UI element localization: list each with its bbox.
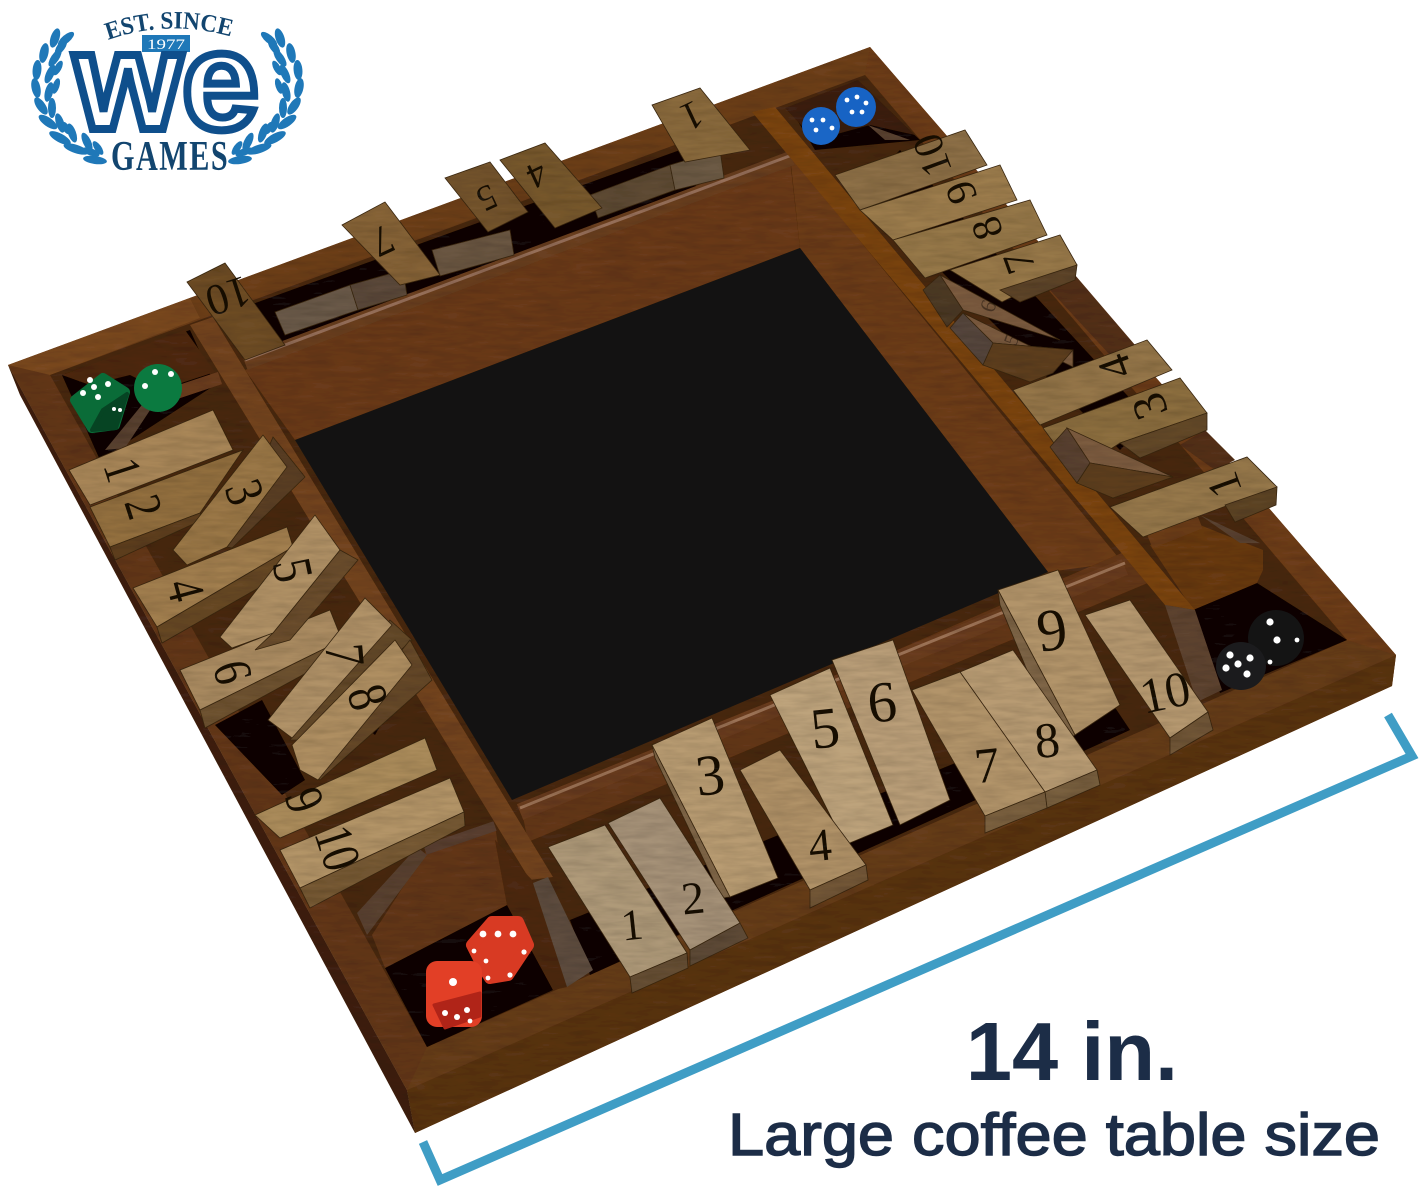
left tile 2 xyxy=(90,450,243,560)
logo laurel left xyxy=(30,27,107,166)
bottom tile 7: 7 xyxy=(972,736,1002,794)
all shut-the-box tiles xyxy=(69,88,1277,993)
flat tile pair A xyxy=(275,270,407,335)
right flipped tile 5 xyxy=(950,313,1073,382)
compartment wall: blue dice xyxy=(785,80,915,140)
dice: blue pair xyxy=(802,87,876,145)
compartment wall: black dice xyxy=(1150,525,1263,610)
dimension heading: 14 in.: 14 in. xyxy=(966,1005,1178,1098)
left tile 3 xyxy=(173,435,305,565)
left side rail stub xyxy=(160,378,220,398)
left tile 7 xyxy=(268,598,412,740)
red die front xyxy=(426,961,482,1028)
bottom tile 10: 10 xyxy=(1135,659,1195,725)
bottom tile 1 xyxy=(548,825,688,993)
dice: green pair xyxy=(75,364,182,430)
dice: black pair xyxy=(1216,610,1304,690)
right tile 4: 4 xyxy=(1087,347,1143,387)
right tile 7 xyxy=(950,235,1077,302)
bottom tile 10 xyxy=(1085,600,1213,755)
top tile 7: 7 xyxy=(363,215,401,265)
right tile 1: 1 xyxy=(1196,465,1252,505)
right tile 9: 9 xyxy=(937,174,987,210)
WE Games logo xyxy=(31,2,304,179)
left tile 4 xyxy=(133,527,293,643)
green die back xyxy=(134,364,182,412)
logo year badge xyxy=(142,35,190,53)
bottom tile 1: 1 xyxy=(618,899,646,951)
left tile 6: 6 xyxy=(201,654,265,690)
bottom tile 2 xyxy=(608,798,748,966)
green die front xyxy=(75,377,127,430)
top tile 1 xyxy=(652,88,750,162)
centre tray back-left wall xyxy=(245,160,800,440)
bottom tile 5: 5 xyxy=(807,694,843,762)
right side rail stub xyxy=(1150,522,1200,542)
right tile 10: 10 xyxy=(904,127,962,183)
right flipped tile 6: 6 xyxy=(974,297,1002,315)
top tile 4: 4 xyxy=(520,153,554,197)
logo laurel right xyxy=(228,27,305,166)
bottom tile 4: 4 xyxy=(806,818,834,872)
top row flat tiles xyxy=(275,150,724,335)
red die back xyxy=(472,922,528,980)
left tile 6 xyxy=(180,610,345,728)
bottom tile 4 xyxy=(740,750,868,908)
left tile 7: 7 xyxy=(313,641,377,669)
left tile 2: 2 xyxy=(112,488,174,526)
top tile 5: 5 xyxy=(470,176,504,220)
left tile 8 xyxy=(292,640,432,780)
left tile 5: 5 xyxy=(260,553,326,587)
top tile 7 xyxy=(342,202,440,285)
bottom tile 6: 6 xyxy=(864,668,900,736)
right tile 7: 7 xyxy=(995,244,1045,280)
tray floor xyxy=(50,75,1347,1047)
top tile 10 xyxy=(187,263,285,360)
right tile 8: 8 xyxy=(963,210,1013,246)
left tile 1 xyxy=(69,410,233,505)
dark floor shadows in the tile slots xyxy=(62,85,1347,1047)
bottom tile 6 xyxy=(832,640,950,825)
left tile 10: 10 xyxy=(302,818,374,878)
logo wordmark we: we xyxy=(73,2,259,159)
top tile 5 xyxy=(445,162,528,232)
black die back xyxy=(1248,610,1304,666)
right tile 8 xyxy=(893,200,1047,278)
bottom tile 2: 2 xyxy=(679,871,707,925)
bevelled lids at compartment corners xyxy=(105,125,1260,935)
bottom tile 3: 3 xyxy=(692,741,728,809)
bottom tile 7 xyxy=(912,672,1047,833)
left tile 3: 3 xyxy=(213,471,277,513)
black die front xyxy=(1216,642,1266,690)
dimension caption: Large coffee table size xyxy=(728,1102,1380,1168)
left tile 1: 1 xyxy=(91,451,153,489)
compartment wall: red dice xyxy=(372,825,507,968)
left tile 10 xyxy=(280,778,465,908)
black felt playing surface xyxy=(295,248,1048,800)
right flipped tile 6 xyxy=(923,275,1060,340)
red compartment rail stub xyxy=(425,826,495,850)
top tile 4 xyxy=(500,143,602,228)
right flipped tile 2 xyxy=(1050,428,1173,498)
logo year badge: 1977 xyxy=(147,37,186,53)
right tile 10 xyxy=(835,127,987,210)
left tile 8: 8 xyxy=(335,677,401,717)
logo wordmark GAMES: GAMES xyxy=(111,132,228,179)
top tile 10: 10 xyxy=(200,266,256,326)
right cross beam xyxy=(752,107,1222,702)
blue dimension bracket xyxy=(423,715,1412,1180)
left tile 9: 9 xyxy=(273,779,337,821)
right tile 3: 3 xyxy=(1121,386,1179,426)
bottom tile 5 xyxy=(770,668,893,845)
blue die front xyxy=(802,107,840,145)
right flipped tile 5: 5 xyxy=(1000,332,1024,348)
bottom tile 8: 8 xyxy=(1032,711,1062,769)
right tile 9 xyxy=(860,165,1017,240)
right tile 1 xyxy=(1110,457,1277,537)
dice: red pair xyxy=(426,922,528,1028)
blue die back xyxy=(836,87,876,127)
bottom tile 9 xyxy=(998,570,1120,745)
right tile 3 xyxy=(1043,378,1207,472)
compartment wall: green dice xyxy=(62,330,215,390)
bottom tile 3 xyxy=(652,718,778,898)
bottom tile 8 xyxy=(960,650,1100,808)
bottom tile 9: 9 xyxy=(1033,595,1071,665)
left tile 5 xyxy=(220,515,358,650)
flat tile pair C xyxy=(590,150,724,218)
logo arc path text: EST. SINCE: EST. SINCE xyxy=(104,12,233,40)
centre tray back-right wall xyxy=(790,155,1122,572)
left tile 9 xyxy=(255,738,437,838)
game pieces and wooden details xyxy=(69,88,1277,993)
right tile 4 xyxy=(1013,340,1172,425)
left cross beam xyxy=(190,317,593,990)
flat tile B xyxy=(432,230,514,276)
slot floor strips xyxy=(1050,275,1235,470)
left tile 4: 4 xyxy=(155,573,215,607)
front rail xyxy=(520,545,1155,842)
back rail xyxy=(245,155,792,363)
top tile 1: 1 xyxy=(673,91,711,141)
